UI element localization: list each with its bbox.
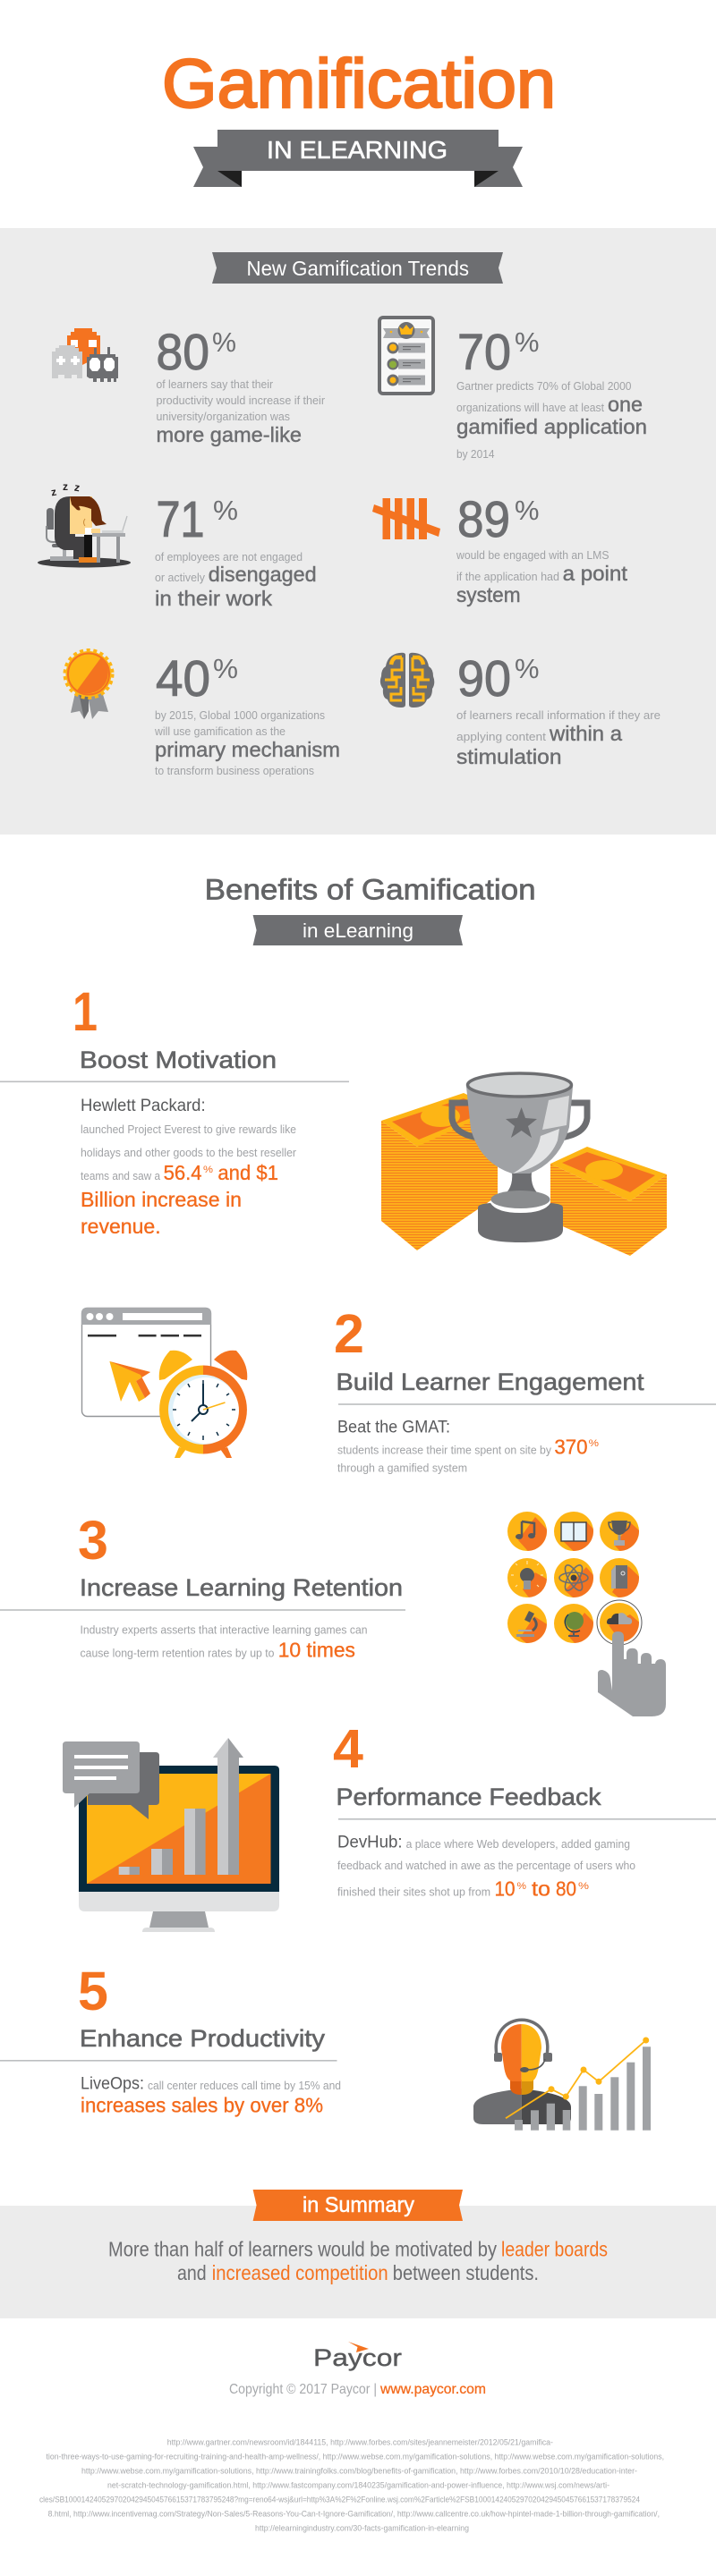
section 4: performance feedback: %	[517, 1881, 526, 1892]
stat: 80%: productivity would increase if their	[156, 394, 326, 407]
section 2: build learner engagement	[334, 1303, 716, 1475]
section 3: increase learning retention: 3	[78, 1510, 108, 1571]
stat: 71%	[155, 491, 317, 610]
source list: net-scratch-technology-gamification.html, http://www.fastcompany.com/1840235/gamification-and-power-influence, http://www.wsj.com/news/arti-	[107, 2480, 609, 2490]
section 1: boost motivation: holidays and other goods to the best reseller	[81, 1146, 297, 1159]
section 5: enhance productivity: 5	[78, 1961, 108, 2021]
banner: new gamification trends	[212, 252, 503, 284]
copyright line: Copyright © 2017 Paycor |	[229, 2382, 377, 2397]
section 1: boost motivation: %	[203, 1165, 213, 1175]
section 4: performance feedback: finished their sites shot up from	[337, 1885, 490, 1899]
stat: 80%: more game-like	[156, 423, 302, 446]
section 5: enhance productivity: call center reduces call time by 15% and	[148, 2079, 341, 2092]
section 4: performance feedback: Performance Feedback	[337, 1784, 601, 1810]
section 2: build learner engagement: through a gamified system	[337, 1462, 467, 1475]
section 2: build learner engagement: 2	[334, 1303, 364, 1364]
stat: 70%: %	[515, 326, 539, 358]
icon: sleeping worker: z	[63, 480, 68, 493]
summary text	[108, 2238, 608, 2284]
icon: monitor with chart	[63, 1738, 279, 1932]
panel: new gamification trends	[0, 228, 716, 835]
stat: 80%: university/organization was	[156, 410, 290, 423]
icon: microscope	[507, 1604, 547, 1643]
section 1: boost motivation: 1	[72, 981, 98, 1042]
source list	[39, 2437, 664, 2533]
summary text: leader boards	[501, 2238, 608, 2261]
section 4: performance feedback: %	[578, 1881, 589, 1892]
stat: 89%: if the application had	[456, 570, 559, 583]
banner: in elearning: in eLearning	[303, 919, 413, 942]
stat: 90%: stimulation	[456, 745, 562, 768]
logo: paycor: Paycor	[313, 2344, 402, 2371]
stat: 40%: by 2015, Global 1000 organizations	[155, 708, 325, 722]
section 2: build learner engagement: students increase their time spent on site by	[337, 1444, 551, 1457]
title ribbon: in elearning: IN ELEARNING	[267, 136, 448, 164]
stat: 89%	[456, 491, 627, 606]
stat: 70%	[456, 324, 647, 461]
section 2: build learner engagement: Build Learner Engagement	[337, 1368, 644, 1395]
icon: music	[507, 1512, 547, 1551]
icon: medal	[65, 651, 112, 719]
icon: trophy	[600, 1512, 639, 1551]
stat: 89%: %	[515, 495, 539, 526]
section 3: increase learning retention: Increase Learning Retention	[80, 1574, 403, 1601]
stat: 80%	[156, 324, 326, 446]
stat: 89%: a point	[563, 562, 627, 585]
icon: tally marks	[372, 498, 440, 539]
section 1: boost motivation: Boost Motivation	[80, 1046, 277, 1073]
section 1: boost motivation: and $1	[217, 1161, 278, 1184]
icon: trophy and money	[381, 1073, 667, 1256]
section 4: performance feedback: feedback and watched in awe as the percentage of users who	[337, 1859, 635, 1872]
section 1: boost motivation	[0, 981, 349, 1238]
title ribbon: in elearning	[193, 130, 523, 187]
icon: browser with alarm clock	[81, 1308, 247, 1458]
icon: sleeping worker: z	[73, 481, 81, 494]
stat: 70%: gamified application	[456, 415, 647, 438]
stat: 70%: organizations will have at least	[456, 401, 604, 414]
stat: 80%: %	[212, 326, 236, 358]
section 4: performance feedback	[333, 1718, 716, 1901]
section 4: performance feedback: 80	[556, 1877, 576, 1901]
source list: cles/SB10001424052970204294504576615371783795248?mg=reno64-wsj&url=http%3A%2F%2Fonline.wsj.com%2Farticle%2FSB1000142405297020429450457661537178379524	[39, 2495, 640, 2504]
section 5: enhance productivity: Enhance Productivity	[80, 2025, 326, 2052]
icon: light bulb	[507, 1558, 547, 1597]
summary text: between students.	[393, 2261, 539, 2284]
source list: http://www.gartner.com/newsroom/id/1844115, http://www.forbes.com/sites/jeannemeister/2012/05/21/gamifica-	[167, 2437, 553, 2447]
title: Gamification	[162, 46, 556, 123]
icon: pixel ghosts	[52, 328, 118, 382]
stat: 40%: primary mechanism	[155, 738, 340, 761]
copyright line	[229, 2382, 486, 2397]
section 4: performance feedback: to	[532, 1877, 550, 1901]
stat: 90%: 90	[457, 650, 511, 708]
icon: tapping hand	[598, 1631, 666, 1716]
stat: 90%: of learners recall information if they are	[456, 708, 661, 722]
stat: 71%: %	[213, 495, 238, 526]
stat: 80%: 80	[156, 324, 209, 381]
stat: 70%: 70	[457, 324, 511, 381]
icon: sleeping worker: z	[50, 486, 57, 498]
section 4: performance feedback: 10	[494, 1877, 516, 1901]
icon: cloud with tap ring	[596, 1599, 643, 1645]
section 2: build learner engagement: Beat the GMAT:	[337, 1419, 450, 1437]
stat: 71%: 71	[156, 491, 204, 548]
section 5: enhance productivity	[0, 1961, 341, 2117]
section 4: performance feedback: 4	[333, 1718, 363, 1779]
section 3: increase learning retention: 10 times	[278, 1639, 355, 1662]
section 1: boost motivation: teams and saw a	[81, 1169, 161, 1182]
stat: 71%: or actively	[155, 571, 205, 584]
stat: 90%	[456, 650, 661, 768]
icon: sleeping worker	[38, 480, 131, 567]
section 2: build learner engagement: 370	[554, 1436, 588, 1459]
banner: in summary: in Summary	[303, 2193, 414, 2217]
stat: 90%: within a	[549, 722, 623, 745]
stat: 70%: by 2014	[456, 447, 494, 461]
banner: in elearning	[253, 915, 463, 945]
icon: book	[554, 1512, 593, 1551]
source list: http://www.webse.com.my/gamification-solutions, http://www.trainingfolks.com/blog/benefits-of-gamification, http://www.forbes.com/2010/10/28/education-inter-	[81, 2466, 637, 2476]
stat: 40%: %	[213, 653, 238, 684]
source list: http://elearningindustry.com/30-facts-gamification-in-elearning	[255, 2523, 469, 2533]
heading: benefits of gamification: Benefits of Gamification	[205, 874, 536, 906]
section 3: increase learning retention: cause long-term retention rates by up to	[81, 1647, 274, 1660]
panel: summary	[0, 2190, 716, 2318]
stat: 71%: in their work	[155, 587, 272, 610]
copyright line: www.paycor.com	[379, 2382, 486, 2397]
banner: in summary	[253, 2190, 463, 2221]
stat: 70%: Gartner predicts 70% of Global 2000	[456, 379, 632, 393]
summary text: More than half of learners would be motivated by	[108, 2238, 497, 2261]
stat: 70%: one	[608, 393, 643, 416]
icon grid: learning topics	[507, 1512, 646, 1650]
icon: brain	[380, 653, 434, 708]
summary text: and	[177, 2261, 207, 2284]
stat: 89%: 89	[457, 491, 510, 548]
stat: 40%: will use gamification as the	[154, 724, 286, 738]
stat: 40%: to transform business operations	[155, 764, 314, 777]
icon: globe	[554, 1604, 593, 1643]
section 1: boost motivation: Billion increase in	[81, 1188, 242, 1211]
section 1: boost motivation: launched Project Everest to give rewards like	[81, 1123, 296, 1136]
section 5: enhance productivity: LiveOps:	[81, 2075, 144, 2094]
source list: 8.html, http://www.incentivemag.com/Strategy/Non-Sales/5-Reasons-You-Can-t-Ignore-Gamification/, http://www.callcentre.co.uk/how-hpintel-made-1-billion-through-gamification/,	[48, 2509, 660, 2519]
section 3: increase learning retention	[0, 1510, 405, 1662]
section 4: performance feedback: DevHub:	[337, 1834, 403, 1852]
stat: 90%: %	[515, 653, 539, 684]
stat: 90%: applying content	[456, 730, 546, 743]
section 1: boost motivation: Hewlett Packard:	[81, 1097, 206, 1115]
stat: 80%: of learners say that their	[156, 377, 274, 391]
section 4: performance feedback: a place where Web developers, added gaming	[406, 1837, 630, 1851]
icon: leaderboard tablet	[379, 318, 433, 394]
stat: 71%: disengaged	[209, 563, 317, 586]
source list: tion-three-ways-to-use-gaming-for-recruiting-training-and-health-amp-wellness/, http://www.webse.com.my/gamification-solutions, http://www.webse.com.my/gamification-solutions,	[47, 2452, 664, 2462]
stat: 71%: of employees are not engaged	[155, 550, 303, 564]
section 2: build learner engagement: %	[589, 1438, 599, 1449]
stat: 40%	[154, 650, 340, 777]
banner: new gamification trends: New Gamification Trends	[247, 257, 469, 280]
icon: call agent with growth chart	[473, 2020, 651, 2131]
summary text: increased competition	[212, 2261, 388, 2284]
section 1: boost motivation: revenue.	[81, 1215, 161, 1238]
icon: atom	[554, 1558, 593, 1597]
stat: 89%: system	[456, 583, 521, 606]
icon: document	[600, 1558, 639, 1597]
stat: 40%: 40	[156, 650, 210, 708]
section 5: enhance productivity: increases sales by over 8%	[81, 2094, 323, 2117]
section 3: increase learning retention: Industry experts asserts that interactive learning games can	[81, 1623, 367, 1637]
section 1: boost motivation: 56.4	[164, 1161, 202, 1184]
stat: 89%: would be engaged with an LMS	[456, 548, 609, 562]
